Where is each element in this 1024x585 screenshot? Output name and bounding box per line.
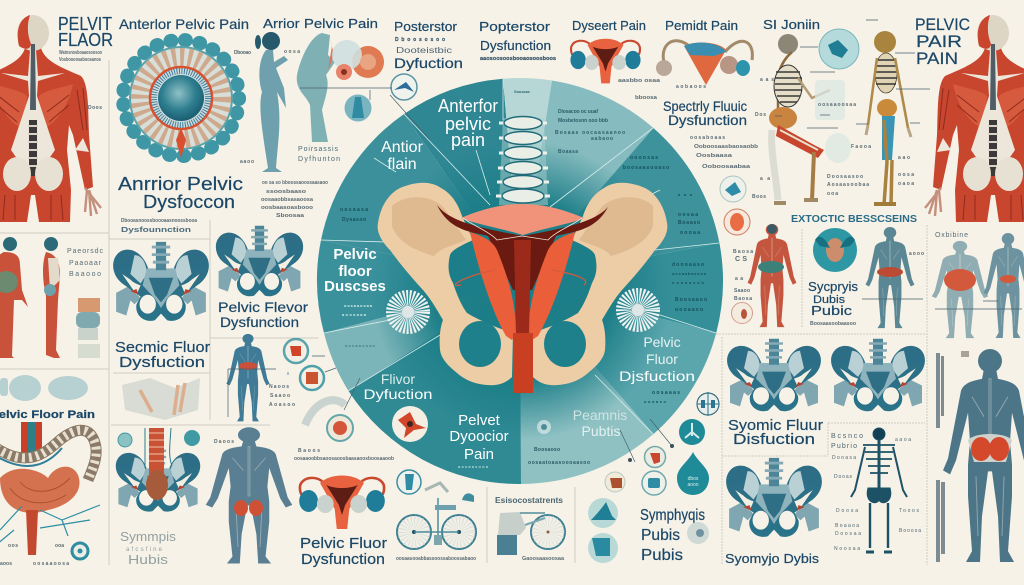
icon: pale badge xyxy=(732,302,752,324)
heading: pelvic pair pain: PAIR xyxy=(916,32,962,51)
caption: dysfunction notes: aobaoos xyxy=(676,84,706,90)
heading: anterior pelvic dysfunction: Dysfoccon xyxy=(143,192,235,212)
wheel microtext: Boaasa xyxy=(558,149,578,155)
icon: grey eye xyxy=(687,522,709,544)
caption: figure notes xyxy=(240,49,328,219)
text: sycpryis dubis pubic: Pubic xyxy=(811,303,853,318)
text: pelvic dysfunction xyxy=(298,146,340,163)
caption: bcsnco pubrio: Noosaa xyxy=(834,546,860,552)
wheel label: pelvet dyoocior pain: Pain xyxy=(464,446,494,463)
wheel label: pelvic floor muscles xyxy=(324,246,386,295)
wheel label: pelvic fluor dysfunction: Pelvic xyxy=(643,334,681,350)
skeleton leaders and notes: Boos xyxy=(752,194,766,200)
figure: blue grey back man xyxy=(206,427,292,563)
wheel label: flivor dyfuction: Dyfuction xyxy=(364,386,432,402)
illustration: bicycle one xyxy=(397,483,476,549)
figure: grey person with red pelvis xyxy=(866,227,914,328)
figure: left muscular back xyxy=(0,15,101,222)
panel: posterior headings xyxy=(394,18,758,202)
icon: teal circle badge xyxy=(344,94,372,122)
caption: bicycle two notes: Gaoosaasoosaa xyxy=(522,556,564,562)
heading: popterstor dysfunction: Popterstor xyxy=(479,19,551,34)
heading: pelvic fluor dysfunction xyxy=(300,535,387,568)
heading: pemidt pain: Pemidt Pain xyxy=(665,18,738,33)
skeleton leaders and notes: oosa xyxy=(898,172,914,178)
panel: exotic body panels xyxy=(724,209,1024,566)
wheel label: pelvet dyoocior pain xyxy=(449,412,509,463)
panel: female anatomy left xyxy=(0,237,104,567)
icon: teal pelvis badge xyxy=(813,228,857,272)
text: pelvic dysfunction: Poirsassis xyxy=(298,146,338,153)
wheel microtext: oooaasob xyxy=(672,280,705,285)
grid dividers xyxy=(0,60,927,565)
caption: bcsnco pubrio: aaoa xyxy=(895,437,911,443)
icon: teal square badge xyxy=(588,533,618,563)
caption: dysfunction notes xyxy=(676,84,758,170)
icon: uterus with tubes xyxy=(656,41,752,85)
heading: syomic fluur disfuction: Syomic Fluur xyxy=(728,417,823,434)
figure: red person xyxy=(748,224,796,327)
icon: uterus top xyxy=(570,39,641,83)
heading: dyseert pain: Dyseert Pain xyxy=(572,18,646,33)
wheel microtext xyxy=(340,89,707,469)
heading: pelvic flevor dysfunction: Dysfunction xyxy=(220,314,299,330)
panel: bottom icons xyxy=(299,378,719,568)
heading: pelvic pair pain: PAIN xyxy=(916,49,958,68)
heading: spectrly fluuic dysfunction xyxy=(663,98,747,128)
caption: figure notes: oo sa so bboossaoossaasaoo xyxy=(262,180,328,186)
pale anatomy row xyxy=(0,375,88,401)
heading: posterior dysfunction left: Dyfuction xyxy=(394,55,463,71)
heading: symphyqis pubis pubis: Pubis xyxy=(641,547,683,564)
caption: red person notes: aa xyxy=(735,276,743,282)
caption: figure notes: Sboosaa xyxy=(276,213,304,219)
heading: pelvic pair pain xyxy=(915,15,970,68)
figure: leaning teal xyxy=(297,33,335,142)
figure: dark skeleton xyxy=(851,428,907,552)
icon: blue circle badge xyxy=(391,74,417,100)
wheel microtext: Diosacoo oc uuaf xyxy=(558,109,598,115)
caption: oxbibine: Oxbibine xyxy=(935,232,968,239)
caption: side notes: Baoos xyxy=(298,448,320,454)
skeleton leaders and notes: Aosaasoobaa xyxy=(827,182,869,188)
caption: intestine notes: ooa xyxy=(55,543,64,549)
caption: red person notes: Saaoo xyxy=(734,288,750,294)
illustration: pelvis bottom xyxy=(726,458,822,537)
wheel microtext: oosaa xyxy=(678,212,698,218)
caption: red person notes: CS xyxy=(735,256,747,263)
wheel label: peamnis pubtis: Pubtis xyxy=(582,423,620,439)
caption: dbooan: Dbooao xyxy=(234,50,251,56)
text: sycpryis dubis pubic: Boosaasoobaasoo xyxy=(810,321,856,327)
wheel label: pelvet dyoocior pain: Pelvet xyxy=(458,412,501,429)
pale anatomy wash xyxy=(815,80,851,163)
heading: pelvic fluor dysfunction: Dysfunction xyxy=(301,551,385,568)
illustration: bicycle two xyxy=(497,512,565,555)
wheel label: peamnis pubtis: Peamnis xyxy=(573,407,627,423)
caption: figure notes: aaoo xyxy=(240,159,254,165)
leaders and notes: Naoos xyxy=(269,384,289,390)
wheel microtext: oosaabassoa xyxy=(672,271,707,276)
heading: popterstor dysfunction xyxy=(479,19,556,62)
wheel microtext: oooosas xyxy=(630,155,658,161)
wheel label: anterior flain xyxy=(381,139,424,173)
heading: symphyqis pubis pubis: Pubis xyxy=(641,527,680,544)
icon: uterus bottom xyxy=(299,476,385,529)
caption: dysfunction notes: Ooboosaabaa xyxy=(702,164,750,170)
heading: pelvic flevor dysfunction xyxy=(218,299,308,330)
caption: dysfunction notes: oosaboaas xyxy=(690,135,725,141)
caption: dysfunction notes xyxy=(121,218,197,234)
illustration: pelvis xyxy=(113,242,209,321)
caption: figure notes: ssoosbaaso xyxy=(266,189,306,195)
heading: secmic fluor dysfuction: Secmic Fluor xyxy=(115,339,210,356)
wheel label: anterior flain: flain xyxy=(387,156,417,173)
caption: pelvit flaor notes: Doos xyxy=(88,105,102,111)
icon: red badge xyxy=(300,366,324,390)
caption: pelvit flaor notes: Vosboooosaboosanos xyxy=(59,57,101,63)
wheel label: anterior pelvic pain: pain xyxy=(451,130,485,150)
caption: dysfunction notes: Dysfounnction xyxy=(121,227,191,234)
caption: red person notes: Baosa xyxy=(733,249,753,255)
text: pelvic notes xyxy=(67,248,104,278)
wheel label: anterior pelvic pain xyxy=(438,96,498,150)
wheel label: flivor dyfuction: Flivor xyxy=(381,371,415,387)
wheel microtext: Boosaoso xyxy=(534,447,560,453)
leaders and notes xyxy=(228,356,336,417)
heading: esisocostatrents: Esisocostatrents xyxy=(495,496,564,505)
caption: pelvit flaor notes xyxy=(59,50,102,111)
heading: pelvit flaor: PELVIT xyxy=(58,14,112,34)
heading: popterstor dysfunction: Dysfunction xyxy=(480,38,551,53)
pelvis bone xyxy=(378,183,667,385)
illustration: pelvis with red spine xyxy=(116,428,200,512)
skeleton leaders and notes xyxy=(752,20,930,200)
wheel label: pelvet dyoocior pain: Dyoocior xyxy=(449,428,509,445)
caption: bcsnco pubrio xyxy=(831,433,921,552)
heading: anterior pelvic dysfunction: Anrrior Pelvic xyxy=(118,174,243,194)
wheel microtext: Sausaae xyxy=(514,89,531,94)
heading: posterior dysfunction left: Dboososoo xyxy=(395,37,445,43)
ovary: right xyxy=(627,299,649,321)
figure: right muscular back xyxy=(925,15,1024,222)
figure: heavy person xyxy=(932,241,988,338)
heading: anterior pelvic dysfunction xyxy=(118,174,243,212)
skeleton leaders and notes: oaoa xyxy=(898,181,914,187)
wheel label: flivor dyfuction xyxy=(364,371,432,402)
caption: bcsnco pubrio: Doosaa xyxy=(835,531,861,537)
wheel label: pelvic fluor dysfunction: Fluor xyxy=(646,351,678,367)
wheel microtext: oooaaso xyxy=(675,307,703,313)
wheel microtext: aoosaaa xyxy=(342,312,367,317)
icon: orange anatomy cluster xyxy=(332,40,384,80)
wheel microtext: aaa xyxy=(678,192,693,197)
icon: small teal pictogram xyxy=(537,420,551,434)
wheel label: anterior flain: Antior xyxy=(381,139,424,156)
text: symmpis pubis: Hubis xyxy=(128,552,169,567)
caption: intestine notes: aoos xyxy=(0,561,12,567)
wheel label: peamnis pubtis xyxy=(573,407,627,439)
icon: blue machine badge xyxy=(642,471,666,495)
panel: central wheel xyxy=(317,78,723,484)
figure: large blue grey back man xyxy=(943,349,1024,562)
text: sycpryis dubis pubic: Sycpryis xyxy=(808,279,859,294)
wheel microtext: aosaaooas xyxy=(345,343,376,348)
wheel microtext: oosaaas xyxy=(652,390,680,396)
panel: standing teal figures xyxy=(240,16,430,219)
figure: female side xyxy=(43,237,60,358)
icon: teal drop: dbos xyxy=(688,476,699,482)
icon: teal circle xyxy=(679,419,705,445)
leaders and dots xyxy=(344,378,674,462)
skeleton leaders and notes: Dos xyxy=(755,112,766,118)
heading: posterior dysfunction left: Posterstor xyxy=(394,19,458,34)
icon: teal circle badge right xyxy=(720,176,746,202)
icon: person badge xyxy=(397,470,421,494)
skeleton leaders and notes: aa xyxy=(760,176,770,182)
caption: bcsnco pubrio: Bcsnco xyxy=(831,433,863,440)
text: pelvic notes: Baaooo xyxy=(69,271,101,278)
caption: side notes xyxy=(214,439,394,462)
icon: teal drop xyxy=(677,452,709,495)
heading: syomic fluur disfuction xyxy=(728,417,823,448)
wheel label: pelvic fluor dysfunction xyxy=(619,334,695,384)
wheel microtext: Dysasoo xyxy=(342,217,366,223)
spine illustration xyxy=(496,116,550,205)
caption and leaders: aooo xyxy=(909,251,924,257)
wheel microtext: Mosbetosnn ooo bbb xyxy=(558,118,608,124)
panel: rosette diagram xyxy=(118,16,251,234)
uterus xyxy=(437,204,608,393)
wheel label: pelvic fluor dysfunction: Djsfuction xyxy=(619,368,695,384)
text: pelvic dysfunction: Dyfhunton xyxy=(298,156,340,163)
wheel segments xyxy=(317,78,723,484)
pale swirl and badge xyxy=(305,400,353,441)
panel: pelvic flevor dysfunction xyxy=(206,226,394,563)
skeleton leaders and notes: oosaaoosaa xyxy=(818,102,856,108)
heading: secmic fluor dysfuction xyxy=(115,339,210,371)
text: pelvic notes: Paaoaar xyxy=(69,260,102,267)
rosette ring xyxy=(123,40,239,158)
caption: red person notes xyxy=(733,249,753,302)
wheel microtext: aabaoo xyxy=(591,136,613,142)
leaders: body panel xyxy=(935,301,1022,309)
caption: dysfunction notes: Ooboosaasbaosaobb xyxy=(694,144,758,150)
heading: pelvic flevor dysfunction: Pelvic Flevor xyxy=(218,299,308,315)
illustration: pelvis pair top xyxy=(727,339,925,411)
icon: teal drop: aooo xyxy=(687,482,699,488)
caption and leaders xyxy=(862,251,924,299)
heading: extoctic besscseins: EXTOCTIC BESSCSEINS xyxy=(791,214,917,225)
text: sycpryis dubis pubic: Dubis xyxy=(813,294,846,306)
wheel label: anterior pelvic pain: Anterfor xyxy=(438,96,498,116)
wheel microtext: aosaasooa xyxy=(458,464,489,469)
figure: squatting skeleton xyxy=(769,34,830,203)
heading: syomyjo dybis: Syomyjo Dybis xyxy=(725,551,820,566)
wheel label: anterior pelvic pain: pelvic xyxy=(445,114,491,134)
heading: arrior pelvic pain: Arrior Pelvic Pain xyxy=(263,16,378,31)
heading: pelvic fluor dysfunction: Pelvic Fluor xyxy=(300,535,387,552)
caption: side notes: Daoos xyxy=(214,439,234,445)
wheel label: pelvic floor muscles: Pelvic xyxy=(333,246,377,263)
icon: teal mountain badge xyxy=(588,498,618,528)
heading: syomic fluur disfuction: Disfuction xyxy=(733,431,815,448)
caption: side notes: oosaaoobbsaoosaoosbaasaoosboosaaoob xyxy=(294,456,394,462)
caption: uterus notes: bboosa xyxy=(635,95,657,101)
figure: slim person xyxy=(984,233,1024,338)
caption: figure notes: oosbaasoasbooo xyxy=(261,205,313,211)
skeleton leaders and notes: aas xyxy=(760,77,774,83)
caption: intestine notes xyxy=(0,543,69,567)
leaders and notes: Aoasoo xyxy=(269,402,295,408)
caption: uterus notes: aasbbo osaa xyxy=(618,78,660,84)
text: symmpis pubis xyxy=(120,529,177,567)
icon: orange badge xyxy=(284,339,308,363)
heading: posterior dysfunction left xyxy=(394,19,463,71)
figure: standing skeleton xyxy=(866,31,911,205)
heading: popterstor dysfunction: aaosoosoosbooaosoosboos xyxy=(480,56,556,62)
wheel microtext: ooaaso xyxy=(644,399,667,404)
caption: uterus notes xyxy=(618,78,660,101)
heading: pelvic pair pain: PELVIC xyxy=(915,15,970,34)
icon: outline circle xyxy=(697,392,719,416)
panel: secmic fluor dysfunction xyxy=(113,242,210,567)
text: symmpis pubis: Symmpis xyxy=(120,529,177,544)
caption: pelvit flaor notes: Watnsnosboaaosoosoo xyxy=(59,50,102,56)
skeleton leaders and notes: aao xyxy=(898,155,910,161)
figure: side female xyxy=(255,32,288,172)
segment rays xyxy=(321,79,719,434)
caption: bcsnco pubrio: Doosa xyxy=(836,508,858,514)
leader lines xyxy=(300,88,430,140)
skeleton leaders and notes: Faooa xyxy=(851,144,871,150)
wheel label: pelvic floor muscles: Duscses xyxy=(324,278,386,295)
caption: vertical notes xyxy=(936,351,969,562)
illustration: intestine xyxy=(0,422,100,559)
wheel microtext: oosaatoaasoooaasoo xyxy=(528,460,590,466)
caption: red person notes: Baosa xyxy=(734,296,752,302)
leaders and notes: Saaoo xyxy=(270,393,290,399)
caption: bcsnco pubrio: Dooasa xyxy=(832,455,856,461)
icon: flame badge xyxy=(724,209,750,235)
heading: symphyqis pubis pubis: Symphyqis xyxy=(640,507,705,524)
caption: dysfunction notes: Dbooasnoossboooaasnoossbooa xyxy=(121,218,197,224)
icon: small anatomy stack xyxy=(76,298,100,358)
heading: secmic fluor dysfuction: Dysfuction xyxy=(119,354,205,371)
heading: si joniin: SI Joniin xyxy=(763,17,820,32)
caption: intestine notes: oosaaoosa xyxy=(33,561,69,567)
heading: spectrly fluuic dysfunction: Dysfunction xyxy=(668,112,747,128)
wheel microtext: doooaaso xyxy=(672,262,704,268)
wheel microtext: oosaaooaa xyxy=(344,303,373,308)
caption: bcsnco pubrio: Pubrio xyxy=(831,443,857,450)
heading: pelvit flaor: FLAOR xyxy=(58,30,113,50)
caption: bcsnco pubrio: Booosa xyxy=(899,528,921,534)
icon: flower badge xyxy=(392,406,428,442)
caption: bcsnco pubrio: Boaaoa xyxy=(835,523,859,529)
caption: figure notes: oosa xyxy=(284,49,300,55)
text: symmpis pubis: afcsfine xyxy=(126,547,163,553)
caption: figure notes: oosaaobbsasaoosa xyxy=(261,197,313,203)
wheel microtext: Boosaaoo xyxy=(675,297,707,303)
wheel microtext: boosaasooaso xyxy=(623,165,669,171)
panel: skeleton figures xyxy=(752,15,970,205)
wheel label: pelvic floor muscles: floor xyxy=(338,263,372,280)
caption: bicycle notes: oosaasooabbassoossaboossabaoo xyxy=(396,556,476,562)
heading: anterior pelvic pain: Anterlor Pelvic Pain xyxy=(119,16,249,32)
skeleton leaders and notes: ooa xyxy=(827,191,838,197)
wheel microtext: oosaasa xyxy=(340,207,368,213)
illustration: pelvis xyxy=(216,226,303,296)
figure: teal person xyxy=(226,334,270,421)
caption: bcsnco pubrio: Dooas xyxy=(834,474,852,480)
pale anatomy wash xyxy=(122,378,200,420)
text: pelvic notes: Paeorsdc xyxy=(67,248,104,255)
caption: intestine notes: oos xyxy=(8,543,18,549)
heading: posterior dysfunction left: Dooteistbic xyxy=(396,46,452,55)
ovary: left xyxy=(397,301,419,323)
wheel microtext: Bosaas oocaasaanoo xyxy=(555,130,625,136)
icon: red badge xyxy=(644,446,666,468)
skeleton leaders and notes: Doosaasoo xyxy=(827,174,863,180)
heading: pelvit flaor xyxy=(58,14,113,50)
heading: spectrly fluuic dysfunction: Spectrly Fluuic xyxy=(663,98,747,114)
text: sycpryis dubis pubic xyxy=(808,279,859,327)
icon: small anatomy xyxy=(605,472,625,492)
wheel microtext: oooaa xyxy=(680,230,700,236)
wheel microtext: Boaaso xyxy=(678,220,700,226)
figure: female front xyxy=(0,237,28,358)
caption: dysfunction notes: Oosbaasa xyxy=(696,153,732,159)
icon: pale teal circle xyxy=(819,29,859,69)
heading: symphyqis pubis pubis xyxy=(640,507,705,564)
caption: bcsnco pubrio: Tooos xyxy=(899,508,920,514)
